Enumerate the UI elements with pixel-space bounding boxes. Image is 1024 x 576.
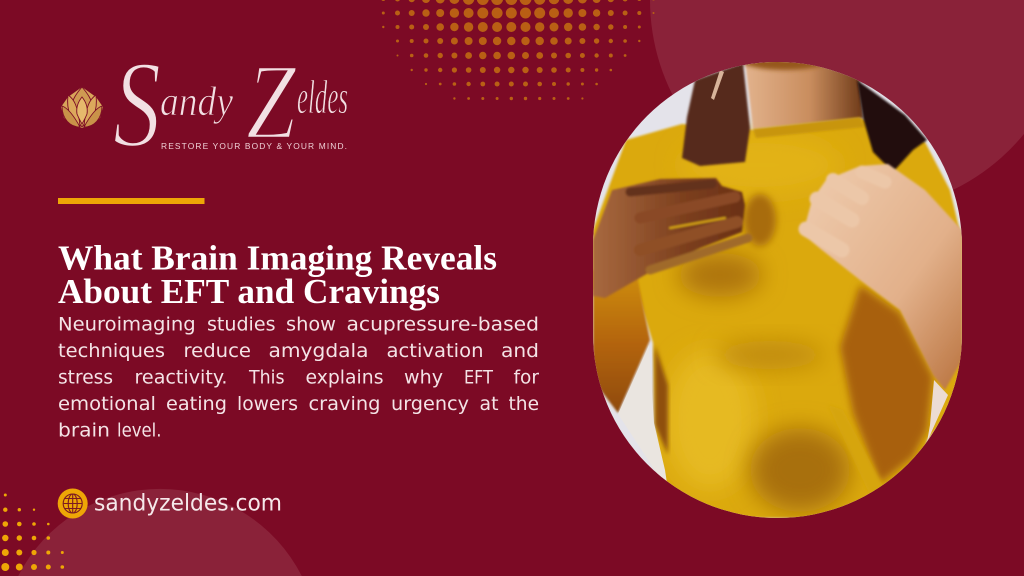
sweater	[593, 118, 962, 518]
body text: reduce	[184, 341, 251, 362]
body text	[58, 315, 539, 442]
body text: activation	[386, 341, 484, 362]
body text: lowers	[237, 394, 298, 415]
accent bar	[58, 198, 204, 204]
body text: the	[508, 394, 539, 415]
halftone dots: bottom left	[1, 494, 64, 571]
body text: level.	[117, 421, 162, 442]
body text: show	[286, 315, 336, 336]
logo wordmark: eldes	[297, 71, 348, 124]
title: About EFT and Cravings	[58, 272, 440, 311]
left hand	[593, 178, 748, 298]
body text: studies	[207, 315, 276, 336]
body text: craving	[308, 394, 380, 415]
body text: acupressure-based	[346, 315, 539, 336]
right hand	[800, 164, 962, 390]
body text: amygdala	[268, 341, 368, 362]
body text: EFT	[464, 368, 494, 388]
body text: and	[501, 341, 539, 362]
left arm	[593, 270, 650, 413]
chin shadow	[742, 62, 823, 73]
lower right backdrop	[927, 380, 948, 442]
hair left	[682, 63, 750, 166]
decorative circle: top right	[650, 0, 1024, 211]
website url: sandyzeldes.com	[94, 491, 282, 517]
logo tagline: RESTORE YOUR BODY & YOUR MIND.	[161, 141, 347, 151]
body text: for	[514, 368, 539, 388]
body text: urgency	[391, 394, 469, 415]
logo wordmark: andy	[160, 78, 234, 124]
logo wordmark	[113, 36, 348, 173]
body text: eating	[166, 394, 227, 415]
hair right	[857, 80, 927, 172]
icon: lotus	[61, 87, 103, 128]
fold highlight	[848, 445, 884, 494]
icon: globe	[58, 488, 88, 518]
website row	[58, 488, 282, 518]
body text: brain	[58, 421, 110, 442]
lower left backdrop	[618, 345, 668, 490]
body text: techniques	[58, 341, 165, 362]
decorative circle: bottom left	[18, 489, 302, 576]
neck	[745, 60, 863, 129]
photo: woman in yellow sweater with hands on chest	[593, 46, 962, 518]
body text: This	[248, 368, 284, 388]
body text: reactivity.	[134, 368, 228, 388]
body text: emotional	[58, 394, 156, 415]
title	[58, 238, 497, 311]
logo	[61, 36, 348, 173]
halftone dots: top	[381, 0, 655, 100]
body text: explains	[306, 368, 384, 388]
body text: Neuroimaging	[58, 315, 196, 336]
logo wordmark: S	[113, 36, 161, 173]
body text: stress	[58, 368, 113, 388]
body text: at	[480, 394, 498, 415]
logo wordmark: Z	[246, 43, 297, 162]
sweater highlights and folds	[655, 135, 850, 512]
hair shine	[711, 70, 724, 100]
body text: why	[404, 368, 443, 388]
collar	[753, 117, 865, 138]
title: What Brain Imaging Reveals	[58, 238, 497, 278]
right side shadow	[840, 285, 933, 483]
photo backdrop	[593, 62, 962, 518]
